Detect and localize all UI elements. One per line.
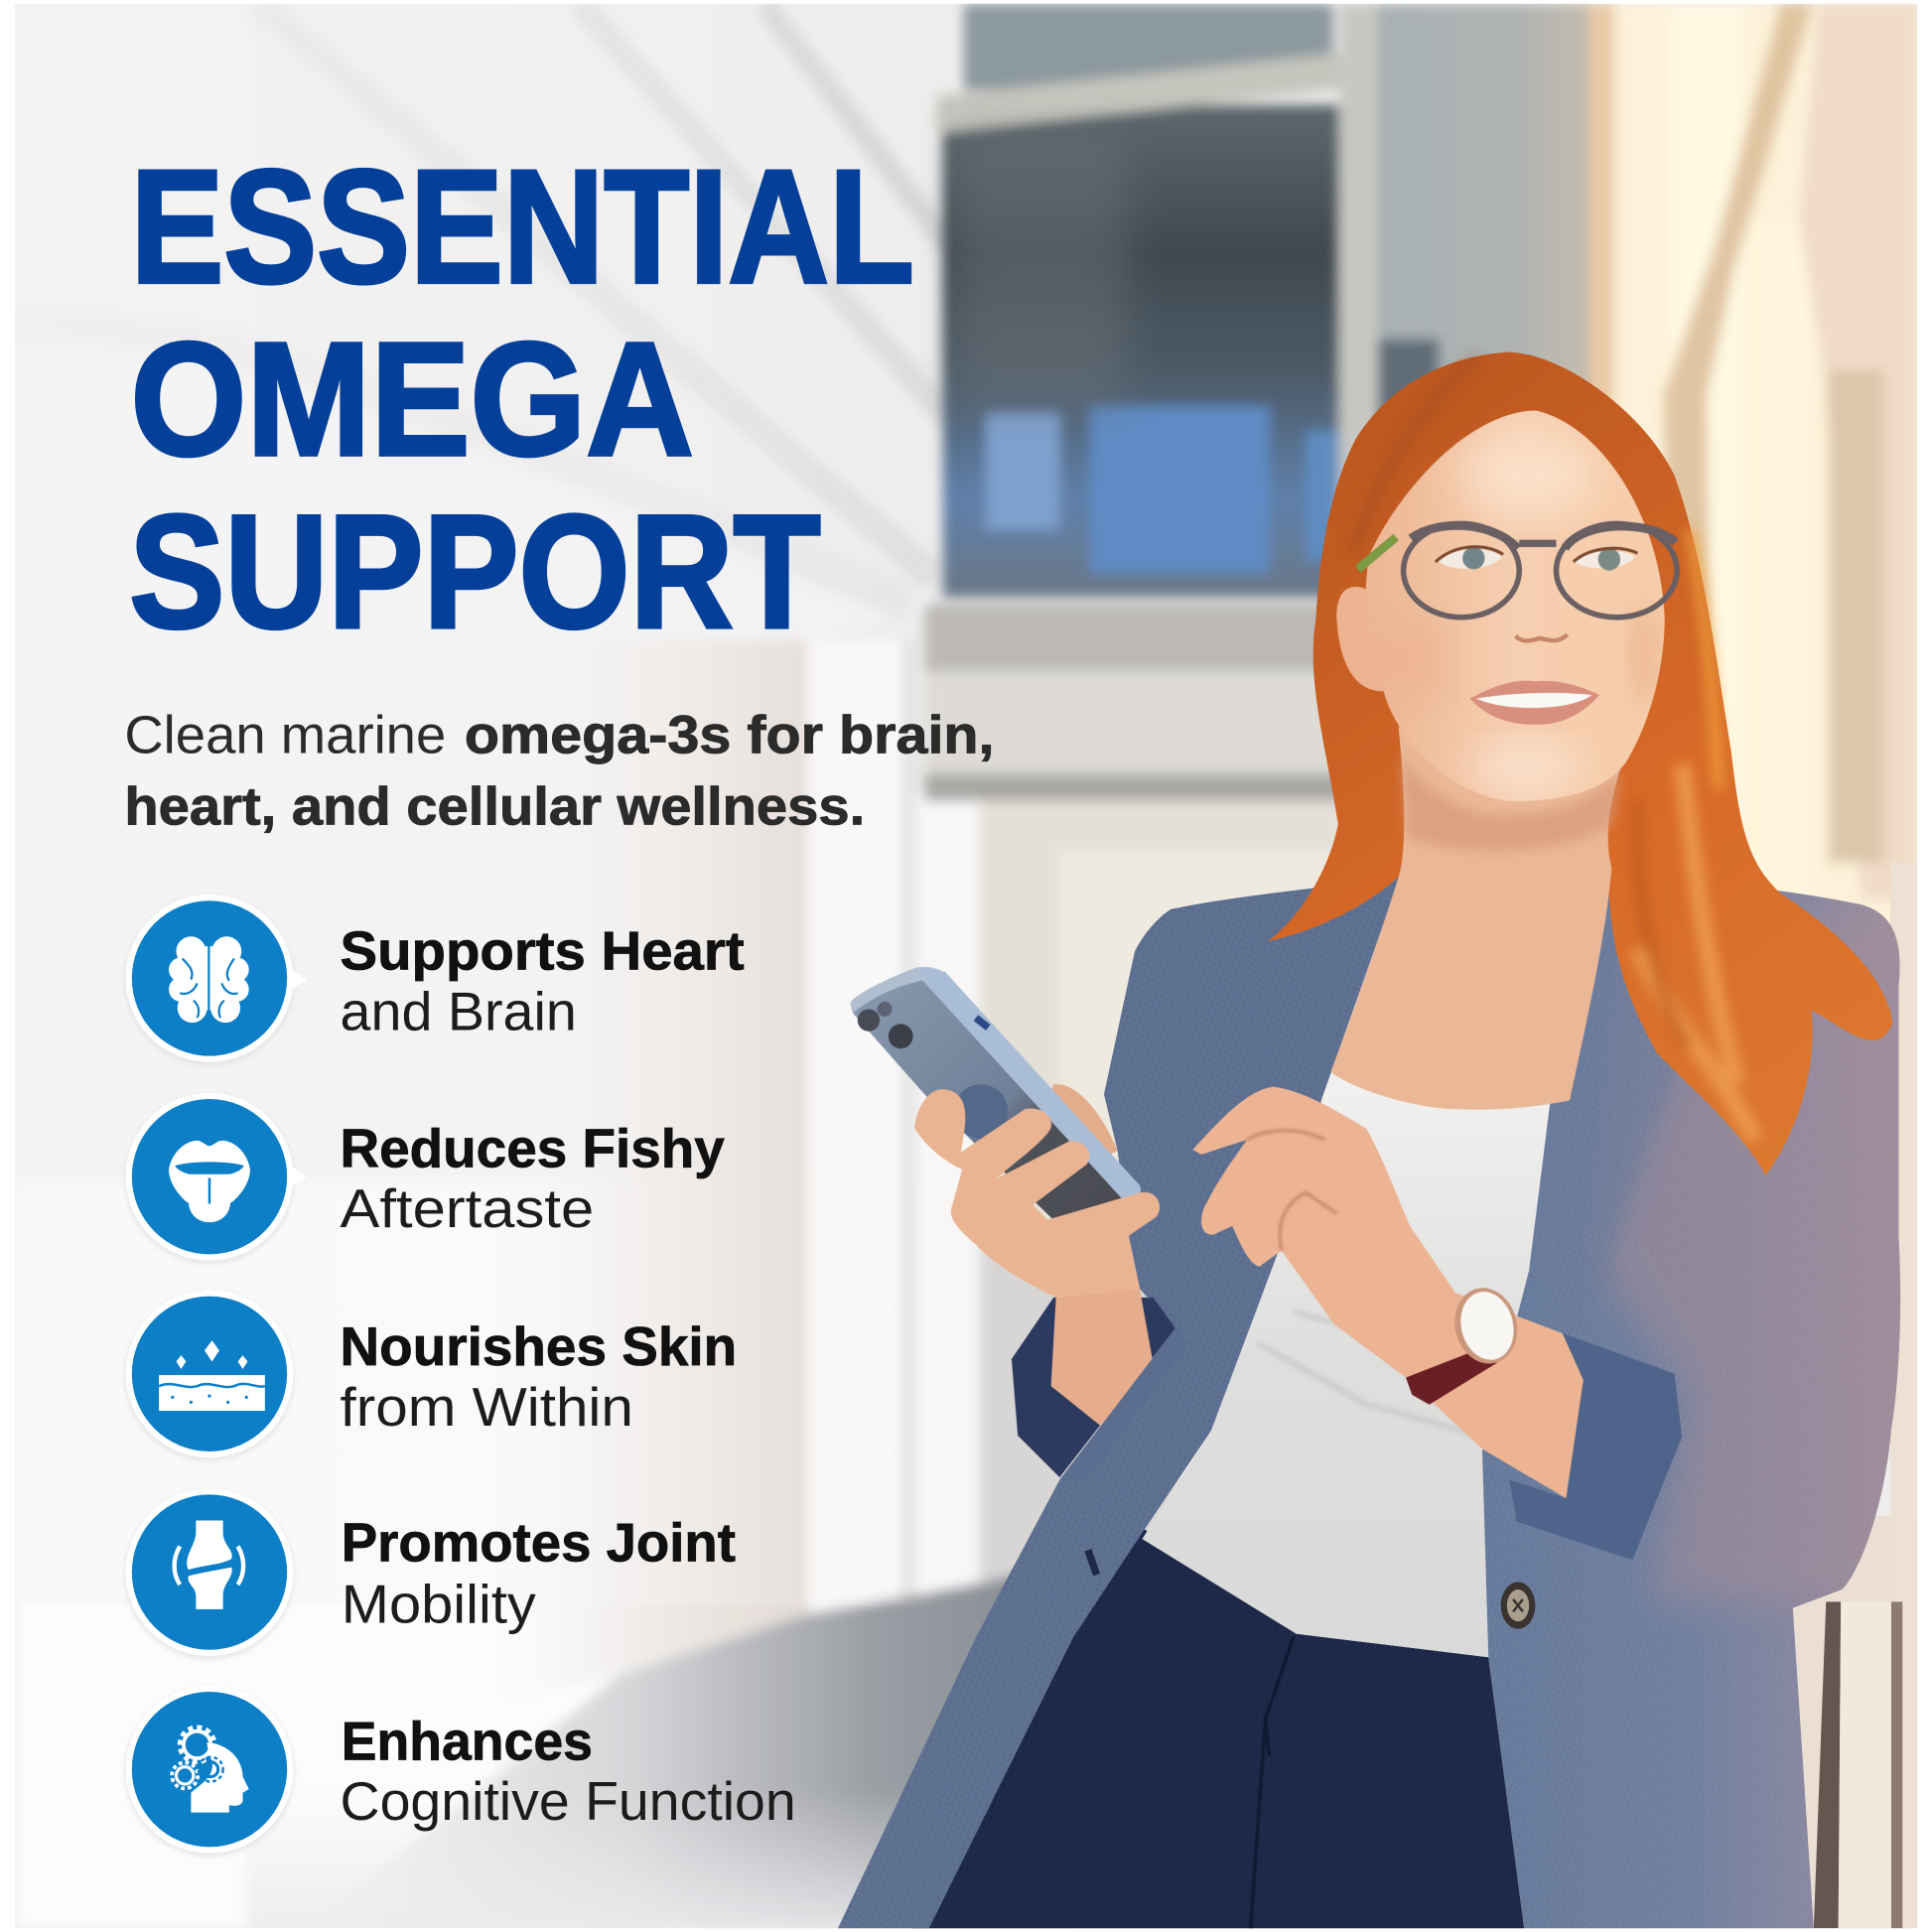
glasses bbox=[1358, 523, 1677, 618]
smartphone bbox=[850, 967, 1141, 1222]
hand finger shading bbox=[1247, 1131, 1337, 1251]
benefit: cognitive function bbox=[124, 1686, 796, 1857]
benefit: fishy aftertaste bbox=[124, 1093, 725, 1264]
column bbox=[1339, 4, 1378, 620]
text: reduces fishy aftertaste: Reduces Fishy bbox=[341, 1118, 725, 1178]
subheading bbox=[124, 706, 995, 836]
jacket: left weave overlay bbox=[838, 875, 1401, 1928]
right forearm and hand bbox=[1192, 1087, 1584, 1498]
text: supports heart and brain: and Brain bbox=[341, 982, 577, 1042]
text: promotes joint mobility: Promotes Joint bbox=[342, 1512, 736, 1573]
white fade overlay on the left bbox=[15, 4, 672, 389]
text: nourishes skin from within bbox=[341, 1316, 737, 1438]
title: SUPPORT bbox=[129, 483, 821, 662]
benefit: joint bbox=[124, 1488, 736, 1660]
icon: knee joint bbox=[124, 1488, 295, 1660]
jacket cuff right bbox=[1509, 1333, 1682, 1560]
top: fold shading bbox=[1257, 1312, 1478, 1436]
hair: strands and highlights bbox=[1353, 359, 1756, 1140]
text: promotes joint mobility: Mobility bbox=[342, 1574, 537, 1634]
text: enhances cognitive function: Enhances bbox=[342, 1711, 593, 1771]
subheading: omega-3s for brain, bbox=[465, 706, 995, 764]
hair: back silhouette bbox=[1268, 352, 1892, 1175]
text: promotes joint mobility bbox=[342, 1512, 736, 1634]
face bbox=[1366, 410, 1665, 801]
icon: tongue bbox=[124, 1093, 307, 1264]
jacket: buttonhole bbox=[1088, 1550, 1097, 1575]
title bbox=[129, 137, 914, 662]
trousers: pinstripe bbox=[911, 1528, 1524, 1928]
trousers: fly seam bbox=[1251, 1636, 1294, 1928]
right edge pillar bbox=[1787, 863, 1922, 1928]
jacket: right sleeve and front bbox=[1482, 883, 1900, 1928]
upper window bbox=[964, 4, 1333, 90]
nose bbox=[1516, 634, 1568, 640]
neck shadow bbox=[1400, 752, 1621, 851]
text: nourishes skin from within: Nourishes Skin bbox=[341, 1316, 737, 1377]
jacket lapel over cuff bbox=[1059, 1328, 1189, 1480]
subheading: Clean marine bbox=[124, 706, 446, 764]
left hand bbox=[914, 1089, 1160, 1298]
wristwatch bbox=[1406, 1282, 1525, 1405]
icon: skin layers bbox=[124, 1290, 295, 1461]
text: enhances cognitive function: Cognitive Function bbox=[341, 1771, 796, 1832]
left forearm bbox=[1051, 1289, 1154, 1426]
white top bbox=[1142, 1072, 1570, 1657]
benefit: skin bbox=[124, 1290, 737, 1461]
jacket cuff left bbox=[1012, 1298, 1175, 1477]
ear bbox=[1336, 587, 1384, 691]
icon: brain bbox=[124, 895, 307, 1066]
benefit: heart and brain bbox=[124, 895, 745, 1066]
blue reflections bbox=[986, 413, 1059, 530]
light wall bbox=[1378, 4, 1593, 521]
blurred architecture bbox=[15, 4, 1343, 1932]
text: supports heart and brain bbox=[341, 921, 745, 1042]
face light and shadow bbox=[1385, 433, 1662, 791]
jacket: pink sleeve tone bbox=[1478, 888, 1922, 1932]
text: reduces fishy aftertaste: Aftertaste bbox=[341, 1178, 594, 1239]
text: enhances cognitive function bbox=[341, 1711, 796, 1832]
icon: head with gears bbox=[124, 1686, 295, 1857]
dark window bbox=[942, 104, 1339, 598]
jacket button bbox=[1501, 1583, 1535, 1629]
window shadow tone bbox=[955, 136, 1128, 407]
subheading: heart, and cellular wellness. bbox=[124, 777, 865, 836]
title: OMEGA bbox=[131, 310, 694, 489]
frame crossbar bbox=[936, 53, 1343, 133]
fingers behind phone bbox=[1047, 1084, 1118, 1165]
title: ESSENTIAL bbox=[131, 137, 914, 317]
text: reduces fishy aftertaste bbox=[341, 1118, 725, 1239]
jacket: left front and sleeve bbox=[838, 875, 1401, 1928]
text: nourishes skin from within: from Within bbox=[341, 1377, 633, 1438]
neck and chest bbox=[1330, 727, 1624, 1110]
photo: woman with phone bbox=[838, 352, 1922, 1932]
trousers bbox=[911, 1528, 1524, 1928]
eyes bbox=[1436, 547, 1637, 571]
sunlit window curtain bbox=[1589, 4, 1922, 1113]
text: supports heart and brain: Supports Heart bbox=[341, 921, 745, 982]
smile bbox=[1470, 681, 1599, 725]
